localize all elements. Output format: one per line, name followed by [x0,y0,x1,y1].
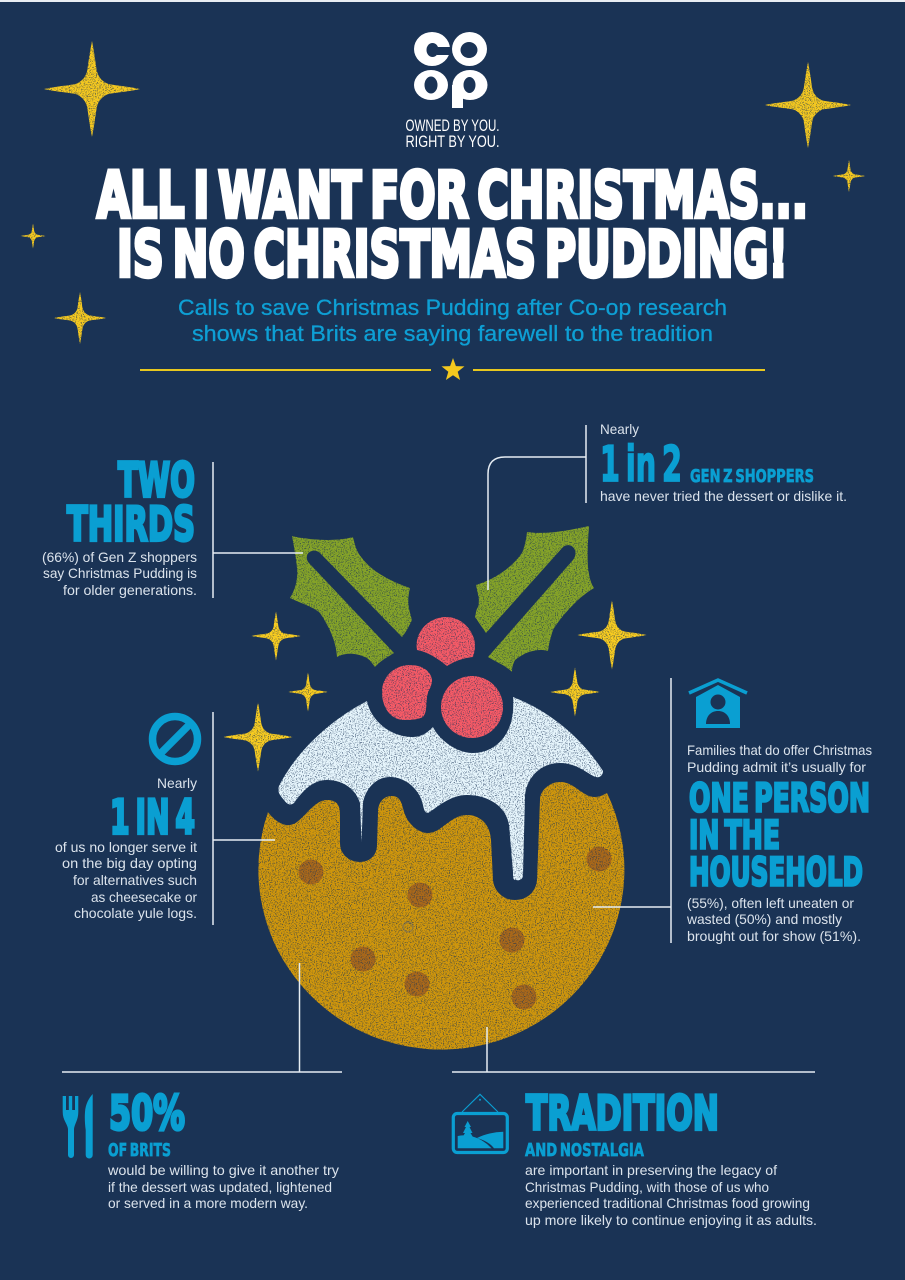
pudding body with raisins [258,782,624,1050]
panel: tradition and nostalgia [452,1027,817,1228]
text: 50% body [107,1163,339,1211]
divider with star [140,358,765,380]
header sparkle stars [20,41,865,344]
text: 1 in 4 body: of us no longer serve it [55,840,197,855]
icon: knife and fork [63,1094,93,1158]
text: 1 in 4 body: as cheesecake or [91,890,197,905]
text: nearly: Nearly [157,776,197,791]
subtitle: Calls to save Christmas Pudding after Co-op research [178,295,727,320]
heading: 1 in 4: 1 IN 4 [110,790,195,846]
logo strapline: OWNED BY YOU. [406,116,500,135]
text: 1 in 4 body: for alternatives such [73,873,197,888]
heading: two thirds: TWO [118,454,195,508]
text: 1 in 4 body: chocolate yule logs. [74,906,197,921]
text: tradition body [525,1163,817,1228]
heading: 1 in 2: 1 in 2 [600,436,682,493]
subtitle: shows that Brits are saying farewell to the tradition [192,321,713,346]
text: tradition body: are important in preserving the legacy of [525,1163,777,1178]
logo strapline: RIGHT BY YOU. [406,132,500,151]
text: household body [686,896,861,944]
heading: one person in the household [689,776,870,896]
text: 50% body: or served in a more modern way. [108,1196,308,1211]
panel: one person in the household [593,678,872,944]
heading: of Brits: OF BRITS [108,1140,171,1161]
text: two thirds body [42,550,197,598]
text: household intro: Pudding admit it’s usually for [687,760,866,775]
panel: two thirds [42,454,303,598]
panel: nearly 1 in 2 [488,422,847,590]
text: household body: brought out for show (51%). [687,929,861,944]
holly leaves [290,526,594,672]
icon: prohibited sign [152,716,198,762]
text: 50% body: if the dessert was updated, lightened [108,1180,332,1195]
holly berries [382,617,503,738]
text: two thirds body: for older generations. [63,583,197,598]
text: tradition body: Christmas Pudding, with those of us who [525,1180,769,1195]
text: household intro [687,743,872,775]
text: household intro: Families that do offer Christmas [687,743,872,758]
text: household body: wasted (50%) and mostly [686,912,842,927]
heading: 50%: 50% [109,1086,185,1142]
heading: one person in the household: IN THE [689,812,780,858]
heading: and nostalgia: AND NOSTALGIA [525,1140,644,1161]
heading: two thirds: THIRDS [67,498,195,552]
text: 1 in 4 body [55,840,197,921]
text: 1 in 4 body: on the big day opting [62,856,197,871]
heading: gen z shoppers: GEN Z SHOPPERS [690,466,814,487]
text: two thirds body: (66%) of Gen Z shoppers [42,550,197,565]
heading: two thirds [67,454,195,552]
title [97,159,808,291]
icing [278,697,603,880]
text: 50% body: would be willing to give it another try [107,1163,339,1178]
subtitle [178,295,727,346]
pudding illustration [224,526,646,1050]
text: household body: (55%), often left uneaten or [687,896,854,911]
text: tradition body: up more likely to continue enjoying it as adults. [525,1213,817,1228]
icon: hanging picture [453,1094,507,1152]
panel: nearly 1 in 4 [55,712,275,925]
heading: tradition: TRADITION [526,1086,719,1142]
text: two thirds body: say Christmas Pudding is [43,566,197,581]
pudding sparkle stars [224,600,646,772]
logo strapline [406,116,500,151]
panel: 50% of Brits [62,963,342,1211]
text: tradition body: experienced traditional Christmas food growing [525,1196,810,1211]
text: nearly: Nearly [600,422,639,437]
icon: house with person [689,680,747,728]
logo: co-op [414,32,488,108]
text: 1 in 2 body: have never tried the dessert or dislike it. [600,489,847,504]
